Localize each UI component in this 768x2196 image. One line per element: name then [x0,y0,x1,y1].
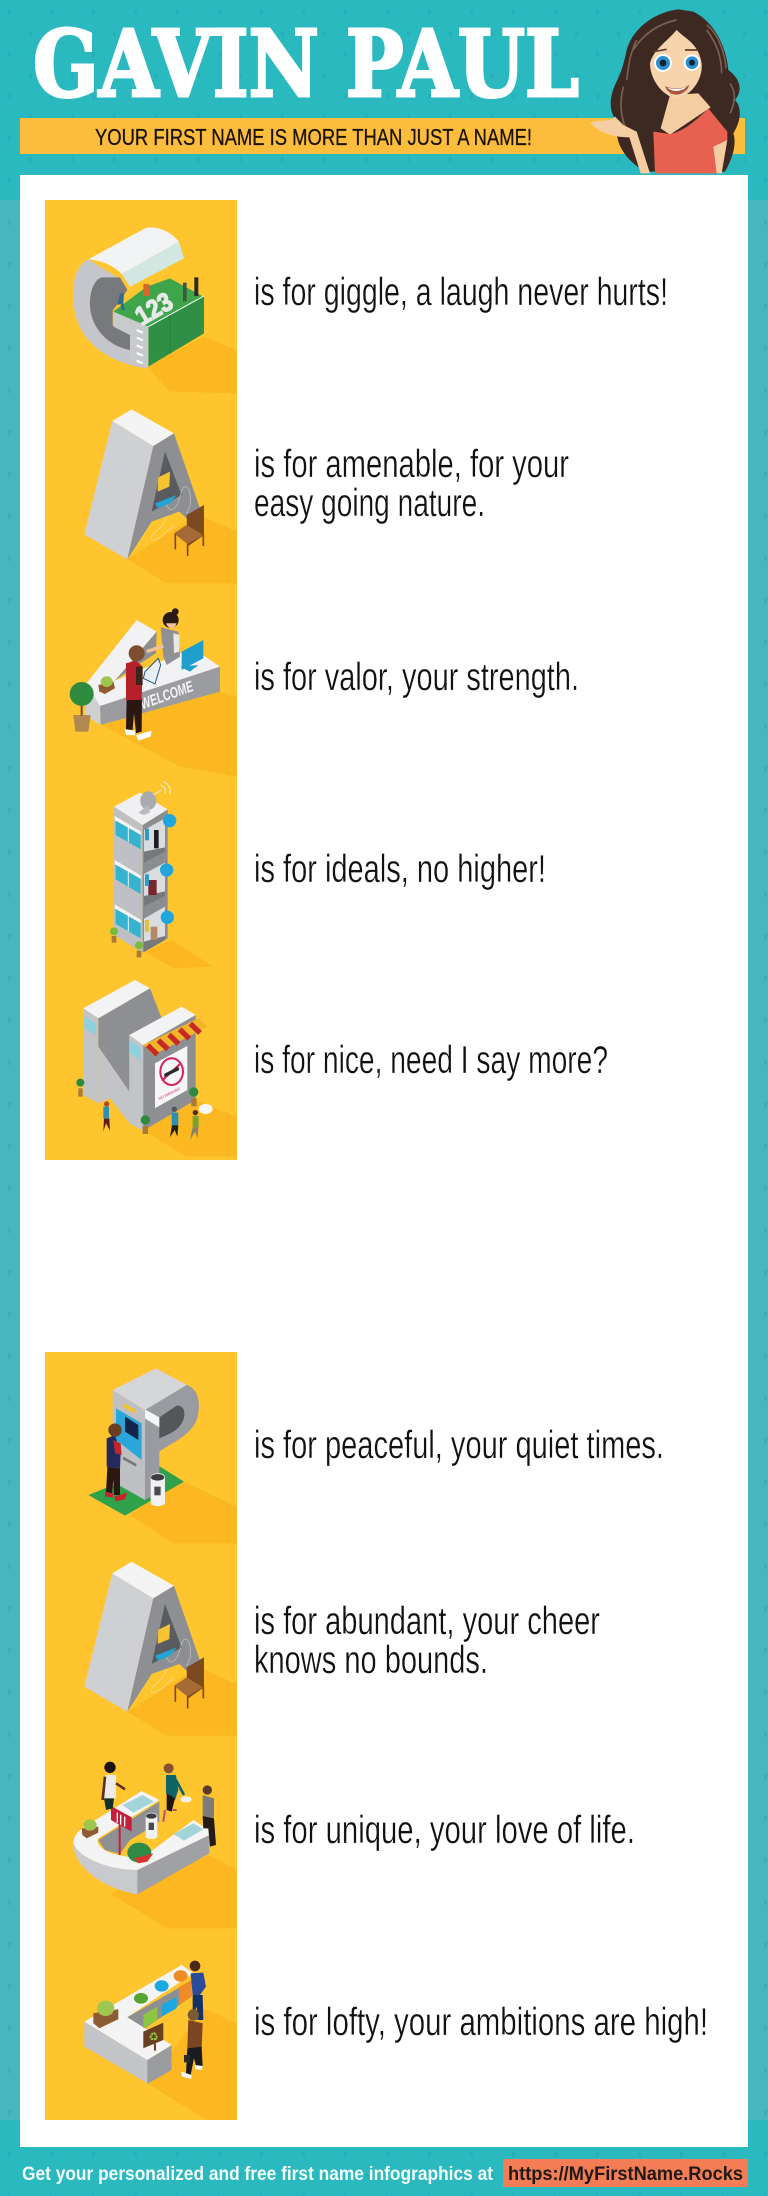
subtitle banner: YOUR FIRST NAME IS MORE THAN JUST A NAME! [95,124,532,150]
illustration: letter I [110,782,213,968]
potted plant [70,682,94,732]
panel: yellow illustrations column bottom [45,1352,237,2120]
chat bubbles [160,814,176,924]
welcome lettering: WELCOME [138,678,196,713]
plants [110,927,143,957]
illustration: letter A [84,409,237,583]
recycling sign [143,2023,163,2051]
floors [115,816,165,952]
illustration: letter A second [84,1562,237,1736]
visitor [125,645,161,741]
number 123: 123 [130,286,178,331]
illustration: letter N [76,980,237,1157]
recycling sign: ♻ [148,2030,158,2044]
recycling bins [134,1970,192,2028]
pedestrians [103,1101,213,1140]
illustration: letter G [73,227,237,393]
text: V line: is for valor, your strength. [254,656,579,699]
illustration: letter V [70,608,237,777]
text: N line: is for nice, need I say more? [254,1039,608,1082]
plant box [82,1819,98,1838]
waiter [203,1785,216,1847]
monitor [180,640,203,672]
trash can [151,1473,165,1506]
title: GAVIN PAUL [33,10,579,118]
no smoking poster: NO SMOKING [158,1087,181,1101]
receptionist [147,608,180,665]
trash can [146,1813,157,1839]
footer call to action: Get your personalized and free first name infographics at [22,2164,494,2185]
text: A line: is for amenable, for your [254,443,569,486]
man in blue [190,1961,206,2020]
dish antenna [138,782,170,815]
text: U line: is for unique, your love of life. [254,1809,635,1852]
mascot: woman presenting [590,9,740,173]
woman staff [103,1762,125,1810]
text: second A line: is for abundant, your cheer [254,1600,600,1643]
ATM screen [116,1403,142,1467]
illustration: letter U [73,1762,237,1928]
striped awning [143,1018,208,1055]
text: A line continued: easy going nature. [254,482,485,525]
illustration: letter L [84,1961,237,2120]
waitress [163,1763,192,1822]
illustration: letter P [88,1368,237,1543]
text: second A line continued: knows no bounds. [254,1639,488,1682]
no smoking poster [155,1046,187,1108]
plant box [93,2001,118,2028]
text: I line: is for ideals, no higher! [254,848,546,891]
plants [76,1079,198,1134]
customer [105,1423,127,1501]
panel: yellow illustrations column top [45,200,237,1160]
small people [117,277,198,310]
man in brown [181,2009,203,2079]
watermelon [127,1843,153,1863]
cutlery sign [111,1806,132,1855]
footer url badge: https://MyFirstName.Rocks [508,2164,743,2185]
subtitle banner [20,118,745,154]
